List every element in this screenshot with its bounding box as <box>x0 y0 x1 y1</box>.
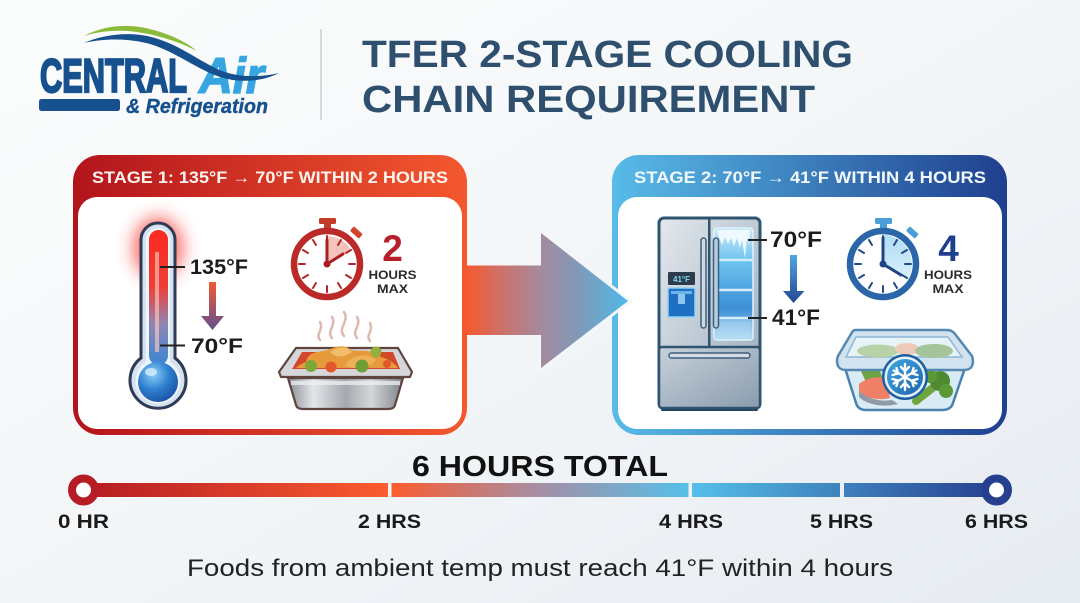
logo tagline: & Refrigeration <box>126 96 268 118</box>
stat: 4 hours max <box>924 228 972 296</box>
timeline labels: 2 HRS <box>358 512 421 533</box>
timeline labels: 4 HRS <box>659 512 723 533</box>
stage 1 heading: STAGE 1: 135°F → 70°F WITHIN 2 HOURS <box>92 168 448 187</box>
timeline labels <box>58 512 1028 533</box>
icon: refrigerator <box>659 218 760 411</box>
stage 2 heading: STAGE 2: 70°F → 41°F WITHIN 4 HOURS <box>634 168 986 187</box>
stat: 4 hours max: HOURS <box>924 268 972 282</box>
timeline heading: 6 HOURS TOTAL <box>412 451 668 483</box>
icon: refrigerator: 41°F <box>673 275 690 284</box>
icon: stopwatch 4 hours <box>850 218 919 297</box>
snowflake glyph lines <box>892 364 918 390</box>
arrow: 70°F down to 41°F <box>783 255 804 303</box>
stat: 2 hours max: HOURS <box>368 268 416 282</box>
stat: 4 hours max: MAX <box>932 282 964 296</box>
arrow: 135°F down to 70°F <box>201 282 224 330</box>
icon: hot food pan <box>279 346 412 409</box>
logo wordmark CENTRAL: CENTRAL <box>40 49 187 102</box>
logo: Central Air & Refrigeration <box>39 26 279 118</box>
label: 70°F: 70°F <box>191 335 243 358</box>
label: 41°F: 41°F <box>772 305 820 330</box>
logo green swoosh <box>84 26 197 51</box>
stat: 2 hours max <box>368 228 416 296</box>
stat: 2 hours max: 2 <box>382 228 403 269</box>
stage 1 content area <box>78 197 462 429</box>
label: 70°F <box>160 335 243 358</box>
label: 70°F <box>748 227 822 252</box>
arrow: stage 1 to stage 2 <box>467 233 628 368</box>
stage 1 frame <box>73 155 467 435</box>
label: 41°F <box>748 305 820 330</box>
timeline bar <box>72 478 1008 502</box>
label: 135°F <box>160 256 248 279</box>
footnote: Foods from ambient temp must reach 41°F within 4 hours <box>187 555 893 582</box>
logo blue swoosh <box>84 34 279 81</box>
icon: thermometer <box>130 218 186 408</box>
title <box>362 34 853 121</box>
timeline labels: 0 HR <box>58 512 109 533</box>
stage 2 content area <box>618 197 1002 429</box>
stat: 2 hours max: MAX <box>377 282 408 296</box>
logo bar <box>39 99 120 111</box>
panel: stage 2 <box>612 155 1007 435</box>
label: 135°F: 135°F <box>190 256 248 279</box>
stat: 4 hours max: 4 <box>938 228 959 269</box>
title: CHAIN REQUIREMENT <box>362 79 815 121</box>
icon: steam <box>318 312 371 341</box>
stage 2 frame <box>612 155 1007 435</box>
timeline end marker <box>985 478 1008 502</box>
timeline start marker <box>72 478 95 502</box>
label: 70°F: 70°F <box>770 227 822 252</box>
title: TFER 2-STAGE COOLING <box>362 34 853 76</box>
icon: chilled food container <box>837 330 973 410</box>
timeline labels: 6 HRS <box>965 512 1028 533</box>
icon: stopwatch 2 hours <box>294 218 363 297</box>
logo wordmark Air: Air <box>197 48 266 104</box>
panel: stage 1 <box>73 155 467 435</box>
timeline labels: 5 HRS <box>810 512 873 533</box>
timeline segments <box>90 483 990 497</box>
